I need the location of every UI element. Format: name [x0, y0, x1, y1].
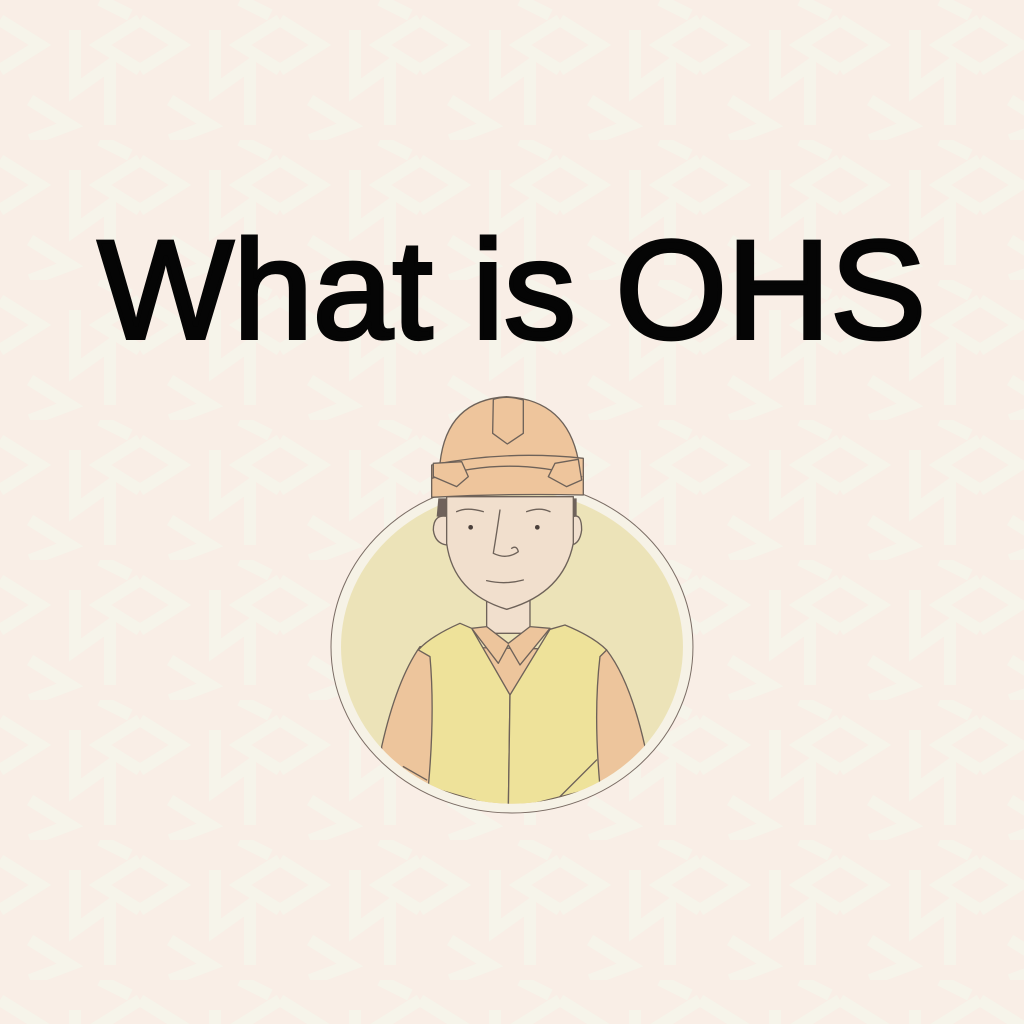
illustration: construction worker — [331, 397, 693, 813]
nose — [493, 510, 518, 556]
vest right — [508, 625, 607, 810]
eyes — [468, 525, 473, 530]
collar — [472, 627, 550, 665]
arms / shirt — [382, 647, 645, 813]
mouth — [487, 580, 523, 583]
body — [382, 593, 645, 813]
title: What is OHS — [98, 211, 926, 368]
vest left — [418, 623, 510, 810]
helmet — [432, 397, 583, 497]
circle background — [331, 481, 693, 813]
eyebrows — [457, 509, 483, 512]
neck — [486, 600, 531, 634]
head — [433, 497, 582, 609]
